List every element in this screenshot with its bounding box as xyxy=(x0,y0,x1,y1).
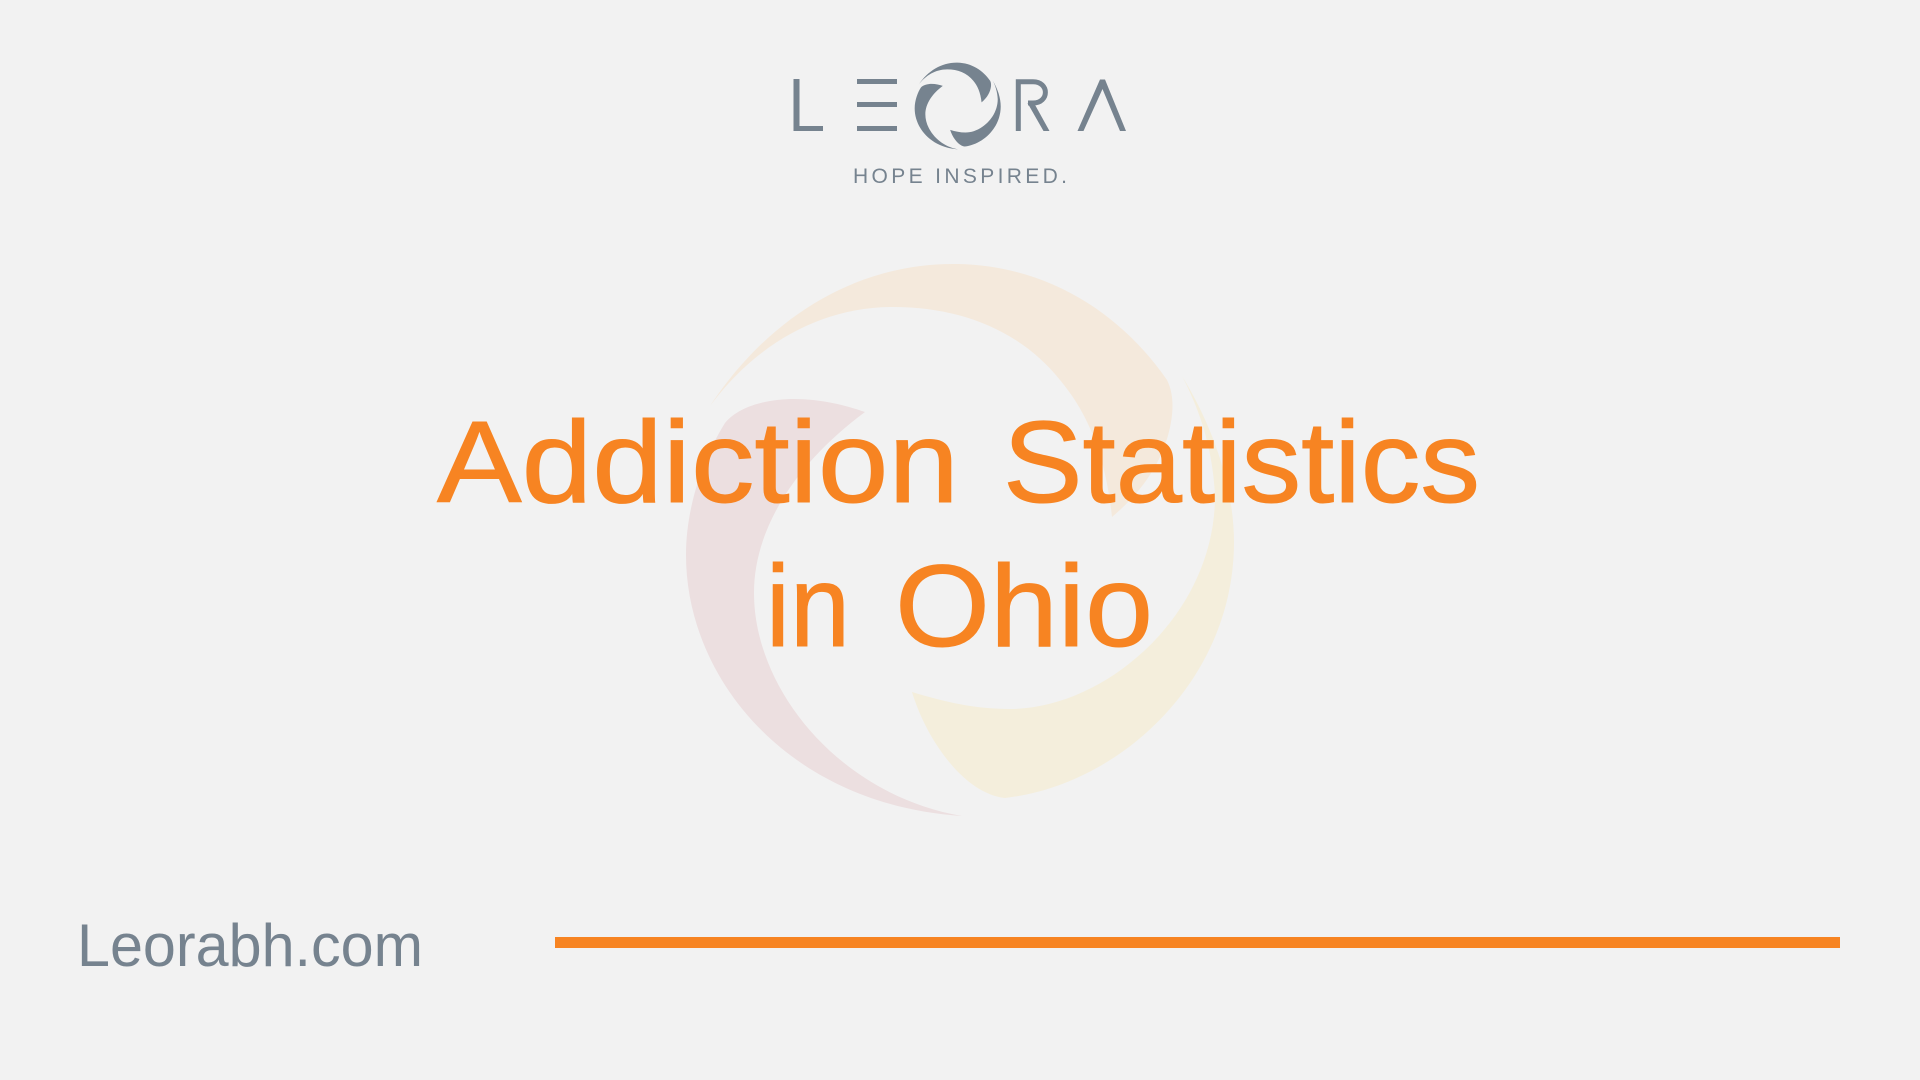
title line 2: Ohio xyxy=(895,541,1153,671)
title line 1: Addiction xyxy=(437,397,959,527)
logo letter E xyxy=(857,79,897,131)
title xyxy=(437,397,1480,671)
background swirl watermark xyxy=(686,264,1234,816)
title line 2: in xyxy=(766,541,850,671)
logo letter L xyxy=(794,79,823,131)
logo letter R xyxy=(1018,82,1050,131)
swirl arc: yellow tint xyxy=(912,376,1234,798)
logo letter A xyxy=(1078,80,1126,131)
logo tagline: HOPE INSPIRED. xyxy=(853,165,1067,188)
swirl arc: orange tint xyxy=(710,264,1172,517)
logo: Leora wordmark with tagline xyxy=(794,63,1126,188)
website address: Leorabh.com xyxy=(77,912,423,979)
orange horizontal rule xyxy=(555,937,1840,948)
swirl arc: pink tint xyxy=(686,399,962,816)
logo swirl icon xyxy=(915,63,1001,149)
title line 1: Statistics xyxy=(1003,397,1480,527)
